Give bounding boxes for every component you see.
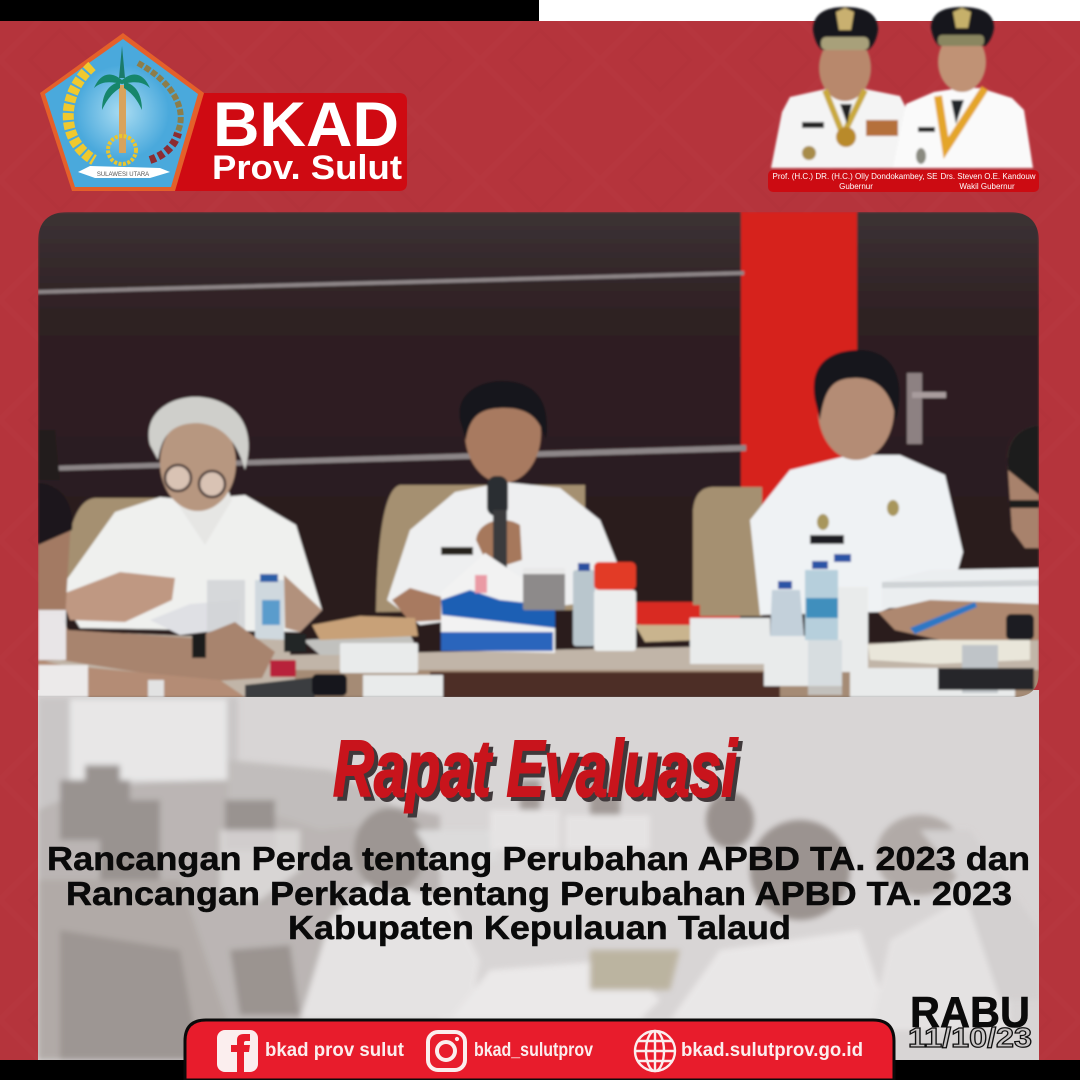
jar, glass and bottles xyxy=(523,562,636,651)
hands and pen, right xyxy=(868,600,1039,693)
arms: foreground xyxy=(38,610,275,697)
red floor strip xyxy=(620,602,740,624)
banner: BKAD Prov. Sulut: BKAD xyxy=(213,90,399,160)
person: foreground left xyxy=(38,430,72,630)
caption: officials' names: Wakil Gubernur xyxy=(959,182,1015,191)
panel: lower faded meeting photo xyxy=(38,690,1039,1060)
stack of documents xyxy=(882,568,1039,608)
red door panel xyxy=(741,212,857,522)
title: Rapat Evaluasi: Rapat Evaluasi xyxy=(333,724,738,813)
person: right man looking down xyxy=(750,350,963,615)
icon: pentagon crest: SULAWESI UTARA xyxy=(97,172,149,178)
white snack boxes xyxy=(340,587,1015,697)
title: Rapat Evaluasi xyxy=(333,724,742,817)
title: Rapat Evaluasi: Rapat Evaluasi xyxy=(337,728,742,817)
person: center man speaking xyxy=(387,381,618,625)
text block: meeting subject: Kabupaten Kepulauan Talaud xyxy=(288,909,791,946)
banner: BKAD Prov. Sulut: Prov. Sulut xyxy=(212,149,402,187)
text block: meeting subject xyxy=(47,840,1030,946)
text block: meeting subject: Rancangan Perkada tentang Perubahan APBD TA. 2023 xyxy=(66,875,1012,912)
date stamp: 11/10/23 xyxy=(908,1022,1032,1053)
caption: officials' names xyxy=(768,170,1039,192)
tissue box xyxy=(441,553,555,653)
wall trim upper xyxy=(38,271,744,294)
panel: main meeting photo xyxy=(38,212,1039,698)
caption: officials' names: Gubernur xyxy=(839,182,873,191)
vice governor figure xyxy=(893,7,1033,168)
icon: pentagon crest xyxy=(40,33,204,191)
label: facebook: bkad prov sulut xyxy=(265,1040,405,1061)
door handle xyxy=(907,373,946,444)
governor figure xyxy=(771,7,907,168)
person: left man with white hair xyxy=(58,397,322,648)
icon: globe xyxy=(635,1031,675,1071)
chairs xyxy=(65,485,762,616)
date stamp: RABU xyxy=(910,988,1030,1037)
governors portrait group xyxy=(768,7,1039,192)
bottom black bar xyxy=(0,1060,1080,1080)
wall trim lower xyxy=(50,445,746,471)
wall xyxy=(38,212,1039,698)
icon: instagram xyxy=(428,1032,465,1070)
label: instagram: bkad_sulutprov xyxy=(474,1040,593,1061)
label: website: bkad.sulutprov.go.id xyxy=(681,1040,863,1061)
caption: officials' names: Prof. (H.C.) DR. (H.C.) Olly Dondokambey, SE xyxy=(772,172,938,181)
footer: social media bar xyxy=(185,1020,894,1080)
top bar: black and white xyxy=(0,0,1080,21)
logo: BKAD banner and provincial crest xyxy=(40,33,407,191)
caption: officials' names: Drs. Steven O.E. Kandouw xyxy=(940,172,1036,181)
text block: meeting subject: Rancangan Perda tentang Perubahan APBD TA. 2023 dan xyxy=(47,840,1030,877)
water bottles xyxy=(770,554,851,695)
banner: BKAD Prov. Sulut xyxy=(172,90,407,191)
icon: facebook xyxy=(217,1030,258,1072)
person: right edge partial xyxy=(1007,425,1039,548)
cable microphone, foreground xyxy=(245,634,347,697)
plates of snacks xyxy=(303,605,700,655)
table xyxy=(38,630,1039,697)
